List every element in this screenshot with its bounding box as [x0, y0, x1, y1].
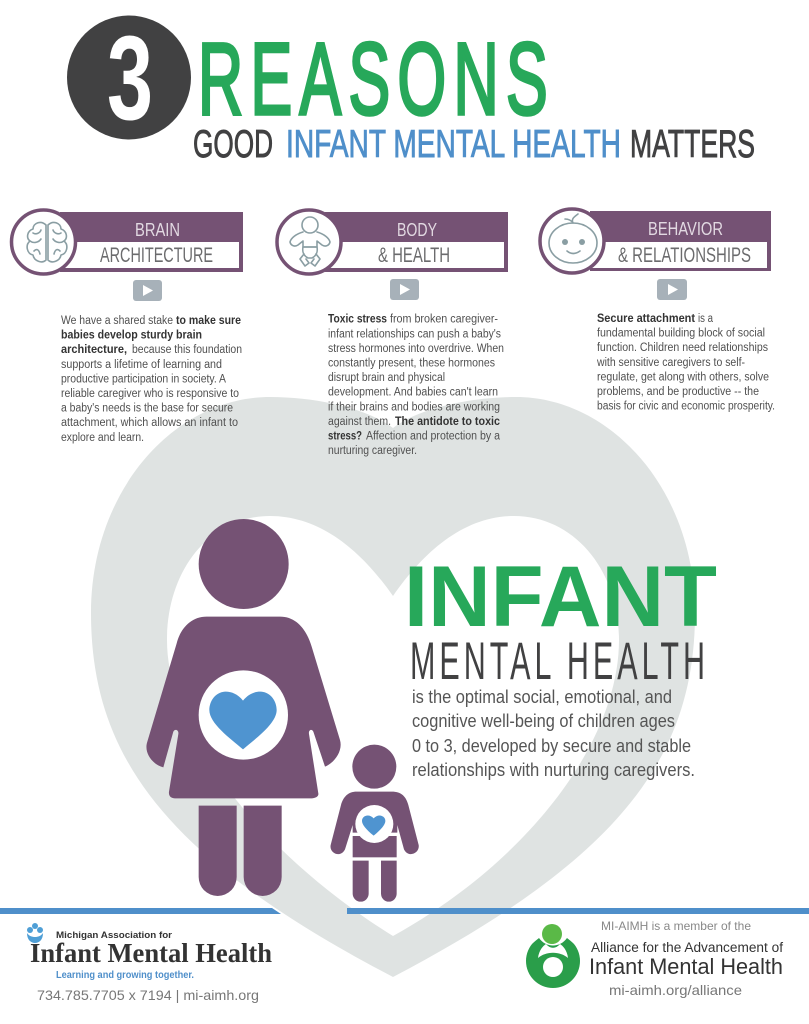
logo: Alliance for the Advancement of Infant Mental Health: MI-AIMH is a member of the: [601, 919, 751, 933]
logo: Alliance for the Advancement of Infant Mental Health: Infant Mental Health: [589, 954, 783, 979]
panel: brain architecture: [12, 210, 243, 444]
text block: function. Children need relationships: [597, 342, 768, 354]
logo: Michigan Association for Infant Mental Health: Michigan Association for: [56, 930, 172, 941]
text block: architecture,: [61, 344, 127, 356]
icon: blue heart: [209, 692, 277, 749]
banner: BRAIN: [135, 220, 180, 240]
text block: nurturing caregiver.: [328, 445, 417, 457]
banner: BEHAVIOR: [648, 219, 723, 239]
text block: supports a lifetime of learning and: [61, 359, 222, 371]
definition text: cognitive well-being of children ages: [412, 711, 675, 731]
subheading: GOOD: [193, 123, 273, 166]
text block: to make sure: [176, 315, 241, 327]
text block: regulate, get along with others, solve: [597, 371, 769, 383]
text block: babies develop sturdy brain: [61, 330, 202, 342]
panel: body and health: [277, 210, 508, 457]
logo: Michigan Association for Infant Mental Health: Infant Mental Health: [30, 938, 272, 968]
definition text: is the optimal social, emotional, and: [412, 687, 672, 707]
text block: stress hormones into overdrive. When: [328, 343, 504, 355]
text block: [61, 315, 242, 444]
banner: & HEALTH: [378, 244, 450, 267]
icon: alliance symbol: [524, 924, 582, 988]
banner: [590, 211, 771, 271]
heading: infant mental health: [404, 549, 717, 691]
number badge: [67, 11, 191, 145]
text block: constantly present, these hormones: [328, 358, 495, 370]
contact line: 734.785.7705 x 7194 | mi-aimh.org: [37, 987, 259, 1003]
text block: explore and learn.: [61, 432, 144, 444]
banner: & RELATIONSHIPS: [618, 244, 751, 267]
text block: problems, and be productive -- the: [597, 386, 759, 398]
icon: baby face: [540, 209, 604, 273]
text block: is a: [698, 313, 713, 325]
figure: child: [331, 745, 419, 902]
text block: against them.: [328, 416, 391, 428]
logo: Alliance for the Advancement of Infant Mental Health: Alliance for the Advancement of: [591, 940, 783, 955]
text block: productive participation in society. A: [61, 373, 226, 385]
play button: [133, 280, 162, 301]
logo: Michigan Association for Infant Mental Health: Learning and growing together.: [56, 970, 194, 981]
definition text: relationships with nurturing caregivers.: [412, 760, 695, 780]
text block: disrupt brain and physical: [328, 372, 445, 384]
text block: because this foundation: [132, 344, 242, 356]
heading: reasons: REASONS: [198, 22, 555, 136]
logo: Michigan Association for Infant Mental Health: [27, 923, 272, 981]
banner: ARCHITECTURE: [100, 244, 213, 267]
text block: infant relationships can push a baby's: [328, 328, 501, 340]
text block: Toxic stress: [328, 314, 387, 326]
logo: Alliance for the Advancement of Infant Mental Health: [524, 919, 783, 998]
play button: [390, 279, 419, 300]
banner: [325, 212, 508, 272]
definition text: [412, 687, 695, 780]
subheading: MATTERS: [630, 123, 755, 166]
text block: development. And babies can't learn: [328, 387, 498, 399]
panel: behavior and relationships: [540, 209, 775, 413]
text block: reliable caregiver who is responsive to: [61, 388, 239, 400]
text block: from broken caregiver-: [390, 314, 498, 326]
number badge: 3: [107, 11, 153, 145]
text block: We have a shared stake: [61, 315, 173, 327]
figure: mother: [146, 519, 341, 896]
text block: attachment, which allows an infant to: [61, 417, 238, 429]
text block: Secure attachment: [597, 313, 695, 325]
divider bar: [0, 908, 809, 914]
subheading: INFANT MENTAL HEALTH: [286, 123, 621, 166]
text block: basis for civic and economic prosperity.: [597, 401, 775, 413]
play button: [657, 279, 687, 300]
logo: Alliance for the Advancement of Infant Mental Health: mi-aimh.org/alliance: [609, 982, 742, 998]
text block: Affection and protection by a: [366, 430, 501, 442]
icon: family cluster: [27, 923, 43, 943]
text block: stress?: [328, 430, 362, 442]
text block: if their brains and bodies are working: [328, 401, 500, 413]
text block: The antidote to toxic: [395, 416, 501, 428]
definition text: 0 to 3, developed by secure and stable: [412, 736, 691, 756]
heading: infant mental health: INFANT: [404, 549, 717, 645]
banner: BODY: [397, 220, 437, 240]
icon: baby: [277, 210, 341, 274]
text block: [328, 314, 504, 457]
text block: a baby's needs is the base for secure: [61, 403, 233, 415]
text block: [596, 313, 775, 413]
background heart outline: [91, 397, 695, 977]
icon: brain: [12, 210, 76, 274]
title: 3 reasons: [67, 11, 755, 166]
banner: [60, 212, 243, 272]
text block: with sensitive caregivers to self-: [596, 357, 745, 369]
text block: fundamental building block of social: [597, 328, 765, 340]
icon: small blue heart: [362, 816, 385, 836]
